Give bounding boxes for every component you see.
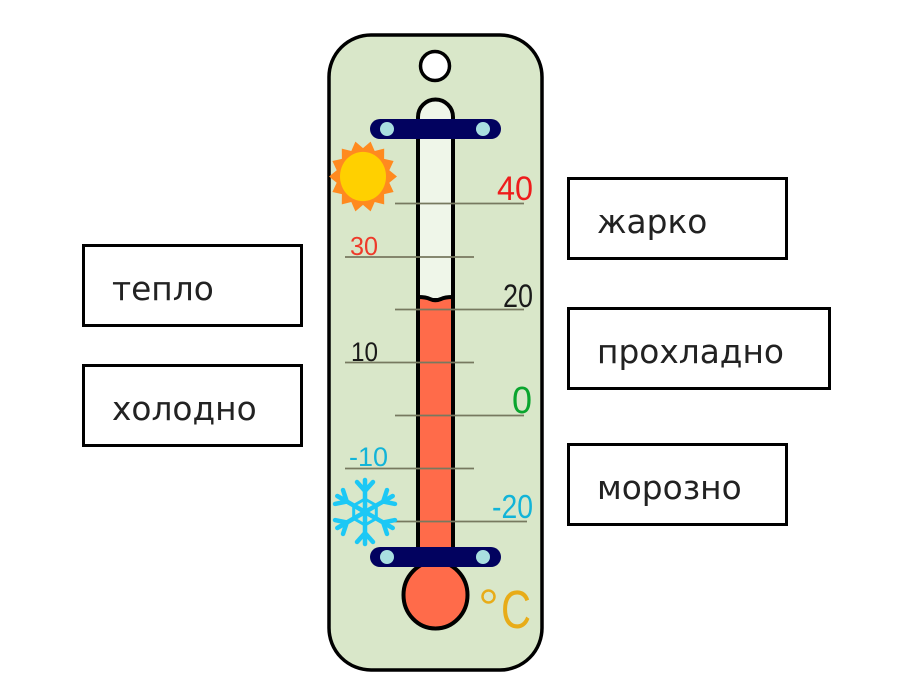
- label: прохладно: прохладно: [597, 333, 784, 371]
- degrees celsius symbol: C: [501, 580, 531, 640]
- thermometer body: [329, 35, 542, 670]
- label: морозно: морозно: [597, 469, 742, 507]
- scale labels: 40: [497, 170, 533, 208]
- scale labels: 0: [512, 380, 532, 422]
- label: жарко: [567, 177, 788, 260]
- icon: sun: [329, 142, 397, 211]
- scale labels: -10: [349, 442, 388, 472]
- upper bracket: [370, 119, 501, 139]
- lower bracket: [370, 547, 501, 567]
- label: морозно: [567, 443, 788, 526]
- hanging hole: [420, 52, 450, 80]
- scale labels: [349, 170, 533, 525]
- icon: snowflake: [333, 480, 397, 544]
- glass tube: [418, 100, 453, 300]
- scale lines: [345, 204, 527, 522]
- scale labels: 20: [503, 278, 533, 314]
- degrees celsius symbol: [482, 580, 531, 640]
- label: тепло: [82, 244, 303, 327]
- label: холодно: холодно: [112, 390, 257, 428]
- scale labels: 10: [351, 337, 378, 367]
- mercury column and bulb: [404, 297, 468, 628]
- label: прохладно: [567, 307, 831, 390]
- label: тепло: тепло: [112, 270, 214, 308]
- label: холодно: [82, 364, 303, 447]
- scale labels: -20: [492, 488, 533, 525]
- scale labels: 30: [350, 231, 378, 261]
- label: жарко: жарко: [597, 203, 707, 241]
